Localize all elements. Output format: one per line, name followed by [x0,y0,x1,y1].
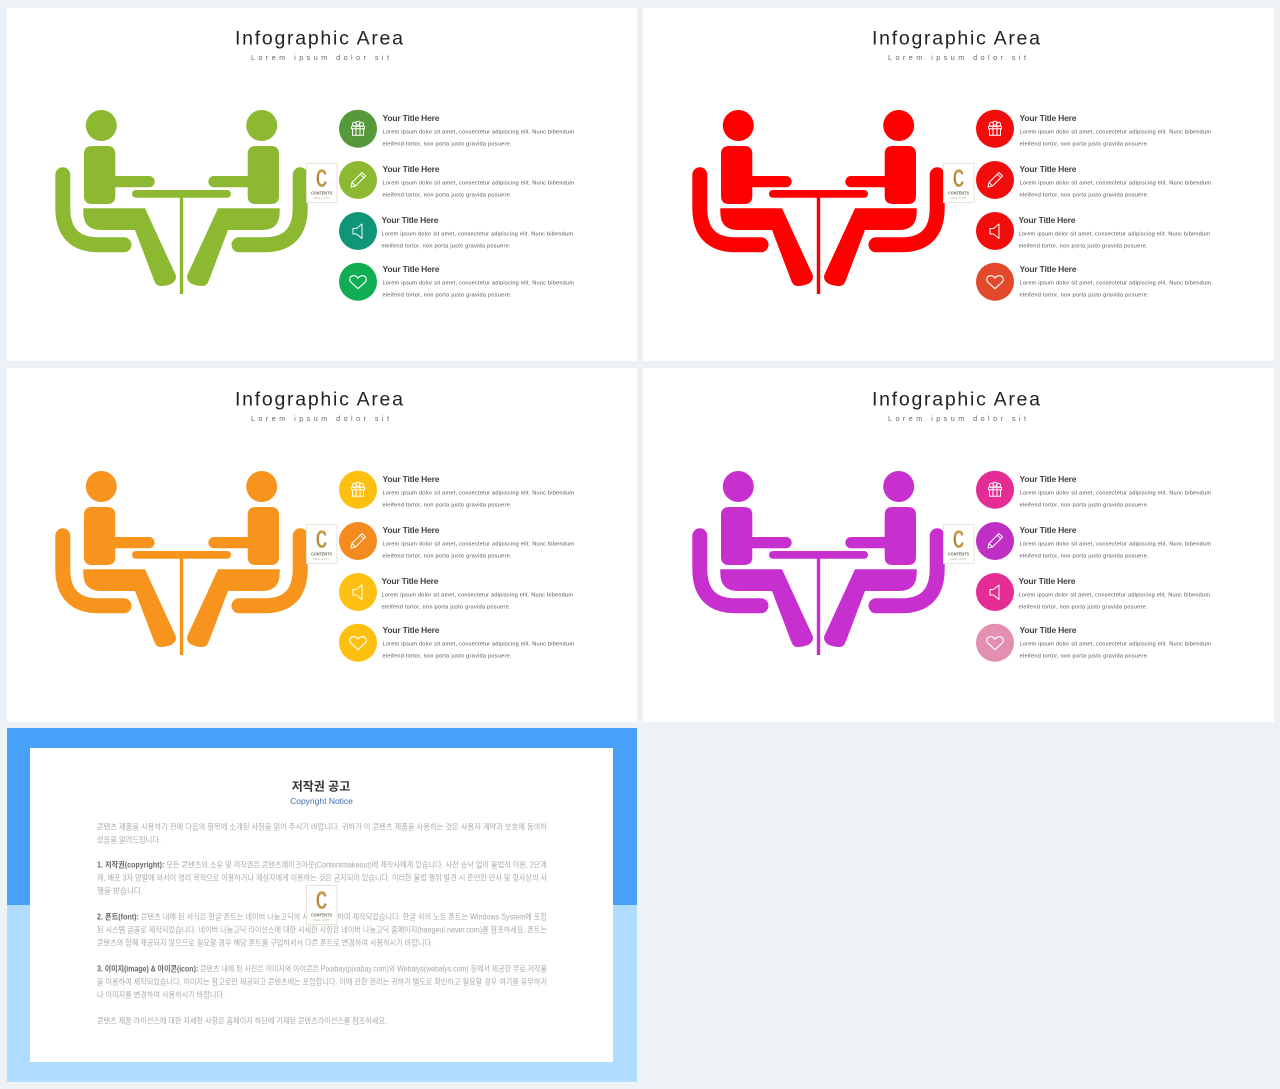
item 1: Your Title Here [1020,474,1077,484]
item 3: eleifend tortor, non porta justo gravida posuere. [382,244,511,250]
section 1: copyright: 1. 저작권(copyright): 모든 콘텐츠의 소유 및 저작권은 콘텐츠메이크아웃(Contentmakeout)에 제작사에게 있습니다. 사전 승낙 없이 불법적 이용, 2단계 [97,860,547,870]
section 3: image and icon: 을 이용하여 제작되었습니다. 이미지는 참고로만 제공되고 콘텐츠에는 포함합니다. 이에 관한 권리는 귀하가 별도로 확인하고 필요할 경우 여기를 유무하거 [97,976,547,986]
notice heading: 저작권 공고 [292,778,350,794]
item 3: Lorem ipsum dolor sit amet, consectetur adipiscing elit. Nunc bibendum [382,592,573,598]
item 4: Lorem ipsum dolor sit amet, consectetur adipiscing elit. Nunc bibendum [382,642,574,648]
section 3: image and icon: 나 이미지를 변경하여 사용하시기 바랍니다. [97,990,225,1000]
panel: green infographic [7,8,637,361]
section 1: copyright: 제, 배포 3자 양발에 와서이 영리 목적으로 이용하거나 제삼자에게 이용하는 것은 금지되어 있습니다. 이러한 불법 행위 발견 시 준언한 민사 및 형사상의 사 [97,872,547,882]
item 4: eleifend tortor, non porta justo gravida posuere. [382,293,512,299]
item 4: eleifend tortor, non porta justo gravida posuere. [382,654,512,660]
item 4: Your Title Here [382,625,440,635]
item 3: eleifend tortor, non porta justo gravida posuere. [1018,604,1148,610]
item 2 [339,522,574,560]
item 2: Lorem ipsum dolor sit amet, consectetur adipiscing elit. Nunc bibendum [1020,542,1211,548]
watermark logo [306,164,337,202]
item 4: Lorem ipsum dolor sit amet, consectetur adipiscing elit. Nunc bibendum [1020,642,1211,648]
panel: orange infographic [7,368,637,722]
item 2: Lorem ipsum dolor sit amet, consectetur adipiscing elit. Nunc bibendum [1020,181,1211,187]
item 4 [339,624,574,662]
section 2: font [97,912,547,948]
item 3: Lorem ipsum dolor sit amet, consectetur adipiscing elit. Nunc bibendum [1018,232,1210,238]
item 1 [339,110,574,148]
section 3: image and icon: 3. 이미지(image) & 아이콘(icon): 콘텐츠 내에 된 사진은 이미지와 아이콘은 Pixabay(pixabay.com)와 Webalys(webalys.com) 등에서 제공한 무료 저작물 [97,964,547,974]
panel: red infographic [643,8,1274,361]
notice subheading: Copyright Notice [290,796,353,806]
title: Infographic Area [235,28,403,50]
item 4: Your Title Here [1020,264,1077,274]
section 2: font: 콘텐츠의 함께 제공되지 않으므로 필요할 경우 해당 폰트를 구입하셔서 다른 폰트로 변경하여 사용하시기 바랍니다. [97,938,433,948]
subtitle: Lorem ipsum dolor sit [251,414,389,423]
item 3 [976,212,1210,250]
item 1 [976,110,1211,148]
panel: purple infographic [643,368,1274,722]
item 2 [976,522,1211,560]
item 2: Lorem ipsum dolor sit amet, consectetur adipiscing elit. Nunc bibendum [382,542,574,548]
item 3: Your Title Here [382,215,439,225]
intro paragraph: 콘텐츠 제품을 사용하기 전에 다음의 항목에 소개된 사항을 읽어 주시기 바랍니다. 귀하가 이 콘텐츠 제품을 사용하는 것은 사용자 계약과 보호에 동의하 [97,822,547,832]
subtitle: Lorem ipsum dolor sit [251,53,389,62]
item 1: eleifend tortor, non porta justo gravida posuere. [1020,142,1149,148]
title: Infographic Area [872,28,1040,50]
item 1: Your Title Here [382,113,440,123]
item 2: Your Title Here [1020,525,1077,535]
title: Infographic Area [235,388,403,410]
item 1 [339,471,574,509]
illustration: two people at a table [700,471,937,655]
item 4 [976,263,1211,301]
item 1 [976,471,1211,509]
item 3: Your Title Here [1018,576,1076,586]
item 1: eleifend tortor, non porta justo gravida posuere. [382,502,512,508]
section 1: copyright: 행을 받습니다. [97,886,143,896]
item 3: eleifend tortor, non porta justo gravida posuere. [1018,244,1148,250]
item 1: Your Title Here [1020,113,1077,123]
item 4: Your Title Here [1020,625,1077,635]
item 3 [339,212,573,250]
item 3: Your Title Here [1018,215,1076,225]
item 1: Lorem ipsum dolor sit amet, consectetur adipiscing elit. Nunc bibendum [382,130,574,136]
item 2 [976,161,1211,199]
item 3: Your Title Here [382,576,439,586]
item 3 [339,573,573,611]
item 2 [339,161,574,199]
item 4: Your Title Here [382,264,440,274]
item 4: eleifend tortor, non porta justo gravida posuere. [1020,293,1149,299]
illustration: two people at a table [63,110,300,294]
item 4: eleifend tortor, non porta justo gravida posuere. [1020,654,1149,660]
intro paragraph [97,822,547,844]
item 3: Lorem ipsum dolor sit amet, consectetur adipiscing elit. Nunc bibendum [1018,592,1210,598]
item 3: eleifend tortor, non porta justo gravida posuere. [382,604,511,610]
item 1: Lorem ipsum dolor sit amet, consectetur adipiscing elit. Nunc bibendum [1020,130,1211,136]
item 2: Lorem ipsum dolor sit amet, consectetur adipiscing elit. Nunc bibendum [382,181,574,187]
illustration: two people at a table [63,471,300,655]
panel: copyright notice [7,728,637,1082]
item 2: eleifend tortor, non porta justo gravida posuere. [382,554,512,560]
watermark logo [944,524,974,564]
item 1: Your Title Here [382,474,440,484]
illustration: two people at a table [700,110,937,294]
section 1: copyright [97,860,547,896]
item 3 [976,573,1210,611]
item 4: Lorem ipsum dolor sit amet, consectetur adipiscing elit. Nunc bibendum [382,281,574,287]
watermark logo [944,164,974,202]
watermark logo [306,524,337,564]
item 2: eleifend tortor, non porta justo gravida posuere. [1020,193,1149,199]
section 2: font: 된 시스템 글꼴로 제작되었습니다. 네이버 나눔고딕 라이선스에 대한 시세한 사항은 네이버 나눔고딕 홈페이지(hangeul.naver.com)를 참조하세요. 폰트는 [97,924,547,934]
item 4: Lorem ipsum dolor sit amet, consectetur adipiscing elit. Nunc bibendum [1020,281,1211,287]
item 2: Your Title Here [1020,164,1077,174]
item 2: eleifend tortor, non porta justo gravida posuere. [1020,554,1149,560]
item 1: Lorem ipsum dolor sit amet, consectetur adipiscing elit. Nunc bibendum [1020,490,1211,496]
section 3: image and icon [97,964,547,1000]
item 2: Your Title Here [382,525,440,535]
watermark logo [306,886,337,924]
closing line: 콘텐츠 제품 라이선스에 대한 자세한 사항은 홈페이지 하단에 기재된 콘텐츠라이선스를 참조하세요. [97,1016,387,1026]
subtitle: Lorem ipsum dolor sit [888,414,1026,423]
item 2: Your Title Here [382,164,440,174]
item 3: Lorem ipsum dolor sit amet, consectetur adipiscing elit. Nunc bibendum [382,232,573,238]
item 1: Lorem ipsum dolor sit amet, consectetur adipiscing elit. Nunc bibendum [382,490,574,496]
item 2: eleifend tortor, non porta justo gravida posuere. [382,193,512,199]
subtitle: Lorem ipsum dolor sit [888,53,1026,62]
item 1: eleifend tortor, non porta justo gravida posuere. [382,142,512,148]
title: Infographic Area [872,388,1040,410]
item 4 [976,624,1211,662]
item 1: eleifend tortor, non porta justo gravida posuere. [1020,502,1149,508]
item 4 [339,263,574,301]
section 2: font: 2. 폰트(font): 콘텐츠 내에 된 서식은 한글 폰트는 네이버 나눔고딕의 서체를 이용하여 제작되었습니다. 한글 외의 노트 폰트는 Windows System에 포함 [97,912,547,922]
intro paragraph: 셨음을 알려드립니다. [97,834,161,844]
